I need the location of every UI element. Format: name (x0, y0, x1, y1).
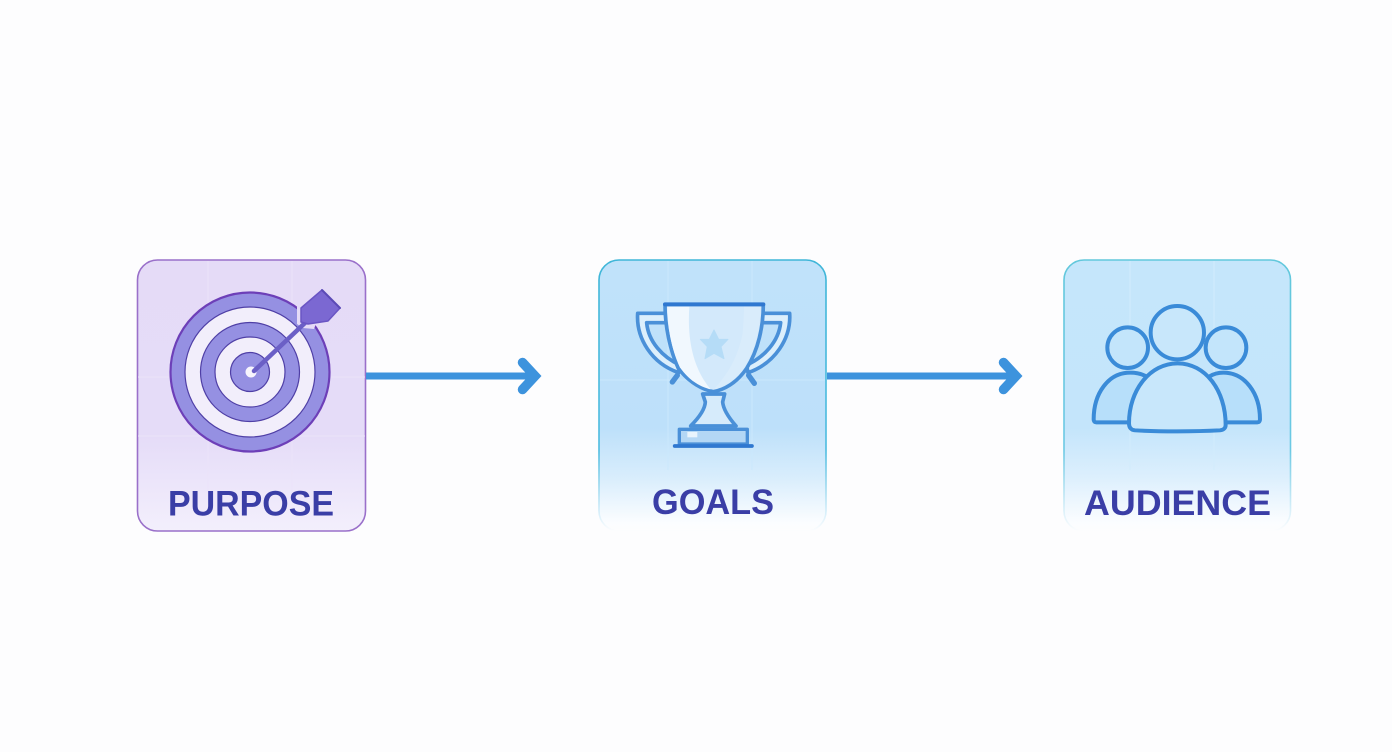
label: purpose: PURPOSE (168, 484, 334, 524)
arrow: purpose to goals (366, 362, 535, 390)
arrow: goals to audience (827, 362, 1016, 390)
label: goals: GOALS (652, 483, 774, 522)
icon: target with dart (170, 290, 340, 452)
label: audience: AUDIENCE (1084, 484, 1271, 523)
icon: trophy star (700, 330, 728, 359)
panel: audience (1064, 260, 1290, 531)
icon: trophy cup (665, 304, 763, 392)
icon: trophy (638, 304, 790, 446)
icon: trophy stem (691, 394, 736, 426)
icon: group of three people (1094, 306, 1260, 431)
panel: purpose (138, 260, 366, 531)
panel: goals (599, 260, 826, 531)
